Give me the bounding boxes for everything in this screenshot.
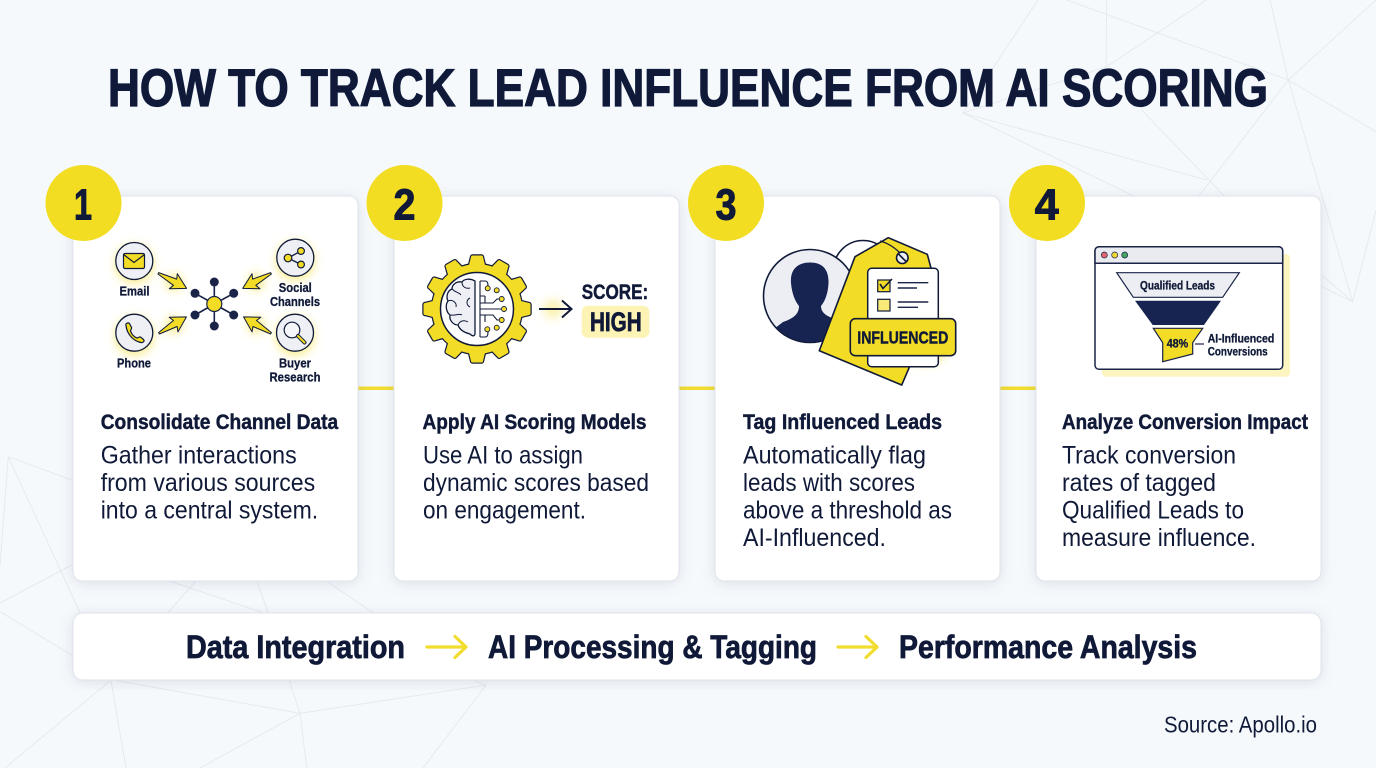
- stage: ai processing and tagging: AI Processing & Tagging: [488, 629, 817, 665]
- panel: step 2 apply ai scoring models: [366, 165, 679, 581]
- icon: magnifier: [276, 314, 314, 351]
- body text: step 1: into a central system.: [101, 497, 318, 525]
- label: buyer research: [270, 356, 321, 384]
- step number badge 2: [366, 165, 442, 241]
- arrow to score: [539, 300, 572, 318]
- callout: ai-influenced conversions: AI-Influenced: [1208, 332, 1274, 346]
- icon: yellow tag with checklist: [819, 238, 956, 385]
- heading: step 1: Consolidate Channel Data: [101, 411, 338, 434]
- bar background: [73, 613, 1321, 680]
- panel: process summary bar: [73, 613, 1321, 680]
- step number badge 2: 2: [394, 180, 416, 230]
- step number badge 1: [46, 165, 122, 241]
- arrows into hub: [154, 266, 275, 341]
- label: phone: Phone: [117, 356, 151, 370]
- icon: phone: [116, 314, 153, 351]
- body text: step 4: Track conversion: [1062, 442, 1236, 470]
- icon: social share: [277, 239, 314, 276]
- label: social channels: Social: [279, 280, 312, 295]
- arrow: stage 2 to 3: [838, 636, 877, 658]
- callout: ai-influenced conversions: Conversions: [1208, 345, 1268, 359]
- body text: step 1: [101, 442, 318, 525]
- badge: influenced: [850, 319, 956, 356]
- heading: step 4: Analyze Conversion Impact: [1062, 411, 1308, 434]
- icon: lead avatar: [762, 240, 878, 344]
- label: social channels: [270, 280, 320, 309]
- funnel: middle stage: [1135, 301, 1221, 325]
- label: social channels: Channels: [270, 294, 320, 309]
- score label: SCORE:: [582, 281, 648, 304]
- step number badge 3: [688, 165, 764, 241]
- body text: step 4: measure influence.: [1062, 524, 1256, 552]
- body text: step 4: rates of tagged: [1062, 469, 1216, 497]
- label: buyer research: Buyer: [279, 356, 311, 370]
- funnel: conversions: 48%: [1167, 337, 1189, 351]
- panel: step 3 tag influenced leads: [688, 165, 1000, 581]
- body text: step 2: on engagement.: [423, 497, 586, 525]
- body text: step 2: dynamic scores based: [423, 469, 649, 497]
- source note: Source: Apollo.io: [1164, 712, 1317, 738]
- heading: step 3: Tag Influenced Leads: [743, 411, 942, 434]
- step number badge 4: 4: [1035, 180, 1059, 230]
- card background: [1036, 196, 1321, 581]
- body text: step 3: above a threshold as: [743, 497, 952, 525]
- body text: step 3: leads with scores: [743, 469, 915, 497]
- panel: step 4 analyze conversion impact: [1009, 165, 1321, 581]
- label: email: Email: [120, 284, 150, 298]
- step number badge 1: 1: [74, 180, 92, 230]
- body text: step 4: Qualified Leads to: [1062, 497, 1244, 525]
- heading: step 2: Apply AI Scoring Models: [422, 411, 646, 434]
- icon: browser window with funnel: [1095, 247, 1290, 377]
- connectors between steps: [358, 386, 1036, 390]
- icon: central hub: [190, 278, 238, 330]
- icon: channels converging on hub: [115, 239, 321, 384]
- score label: [582, 281, 649, 338]
- badge: influenced: INFLUENCED: [857, 328, 948, 348]
- icon: brain in gear: [424, 256, 530, 362]
- funnel: qualified leads: Qualified Leads: [1140, 278, 1215, 292]
- step number badge 3: 3: [716, 180, 736, 230]
- funnel: conversions: [1153, 328, 1203, 362]
- body text: step 3: Automatically flag: [743, 442, 926, 470]
- body text: step 3: [743, 442, 952, 552]
- score label: HIGH: [590, 307, 642, 337]
- body text: step 4: [1062, 442, 1256, 552]
- body text: step 3: AI-Influenced.: [743, 524, 886, 552]
- stage: performance analysis: Performance Analysis: [899, 629, 1197, 665]
- card background: [394, 196, 679, 581]
- card background: [715, 196, 1000, 581]
- label: buyer research: Research: [270, 370, 321, 384]
- step number badge 4: [1009, 165, 1085, 241]
- callout: ai-influenced conversions: [1195, 332, 1274, 359]
- stage: data integration: Data Integration: [186, 629, 405, 665]
- funnel: qualified leads: [1117, 273, 1239, 297]
- card background: [73, 196, 358, 581]
- body text: step 1: from various sources: [101, 469, 315, 497]
- body text: step 1: Gather interactions: [101, 442, 297, 470]
- arrow: stage 1 to 2: [427, 636, 466, 658]
- icon: email: [116, 242, 153, 280]
- body text: step 2: [423, 442, 649, 525]
- panel: step 1 consolidate channel data: [46, 165, 358, 581]
- body text: step 2: Use AI to assign: [423, 442, 583, 470]
